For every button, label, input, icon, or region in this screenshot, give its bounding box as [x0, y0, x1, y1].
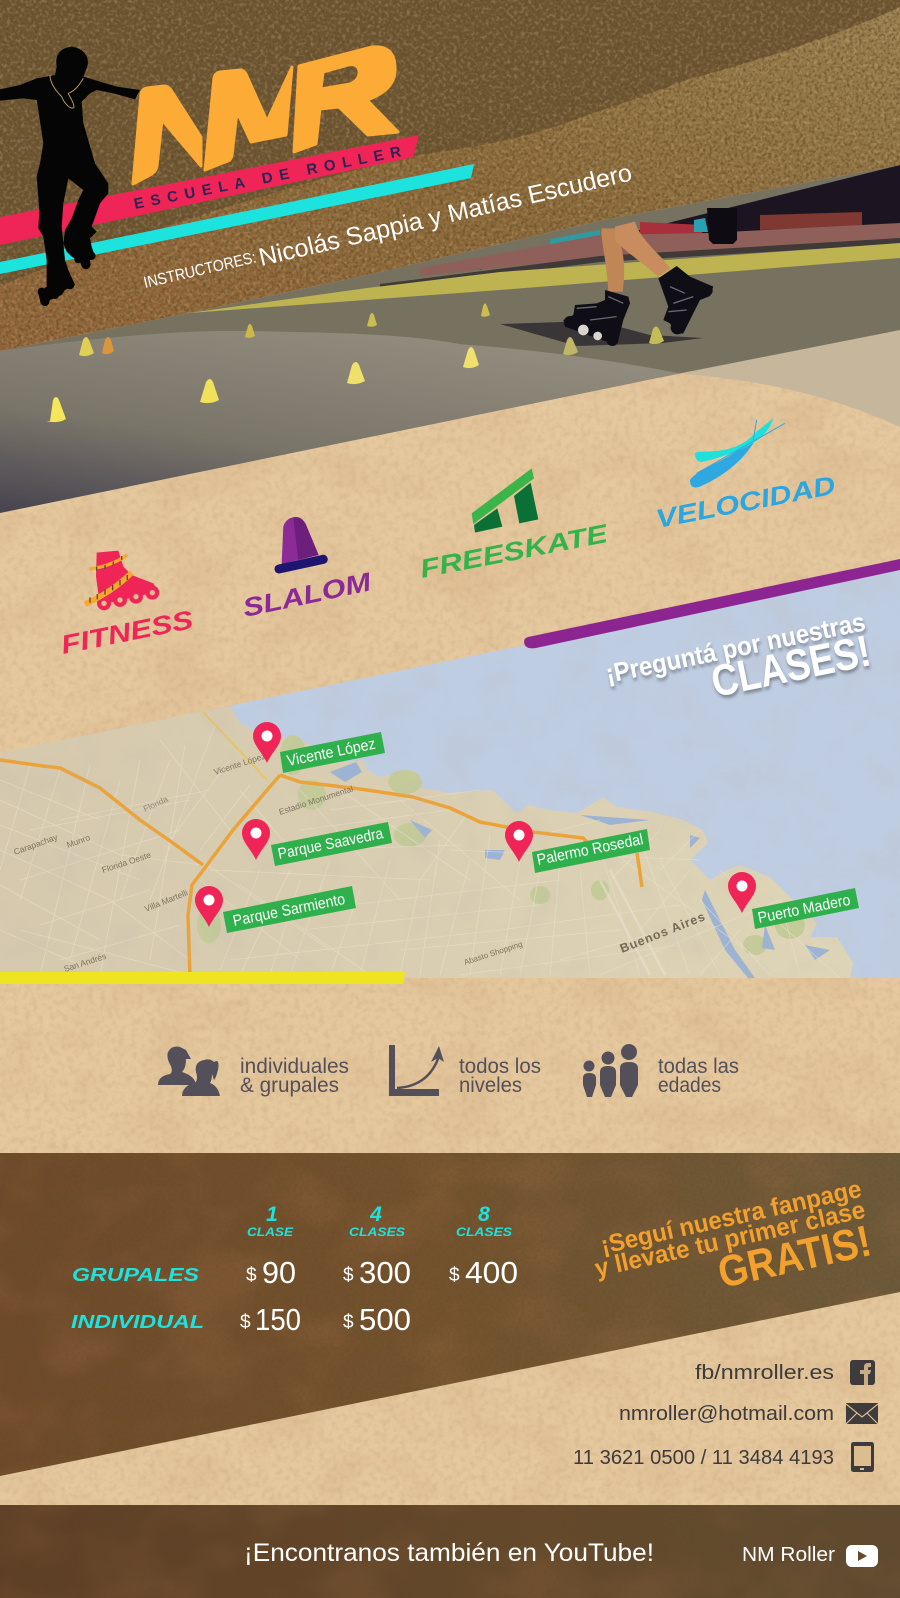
location: Parque Saavedra: Parque Saavedra [276, 825, 385, 863]
column headers: 4 [369, 1203, 382, 1226]
parks [197, 735, 805, 955]
feature: todas las edades [583, 1044, 739, 1097]
class type: velocidad [653, 418, 838, 534]
contact: phone [573, 1442, 874, 1472]
panel: map [0, 560, 900, 980]
class type: freeskate: FREESKATE [417, 518, 610, 584]
highways [0, 760, 642, 978]
map place names: Carapachay [12, 832, 59, 857]
location: Parque Sarmiento [195, 886, 356, 933]
prices: 400 [465, 1255, 518, 1290]
column headers: CLASES [456, 1227, 512, 1239]
map place names [12, 751, 524, 974]
feature: todos los niveles: todos los [459, 1055, 541, 1078]
yellow stripe [0, 972, 405, 984]
map place names: Florida Oeste [101, 850, 152, 875]
logo red bar with tagline [0, 135, 419, 245]
class type: slalom [240, 517, 375, 623]
cyan stripe [0, 164, 474, 274]
price table [71, 1203, 518, 1337]
location: Parque Sarmiento: Parque Sarmiento [231, 891, 347, 930]
class type: freeskate [417, 468, 610, 584]
prices: 90 [262, 1255, 296, 1290]
class type: fitness: FITNESS [58, 604, 196, 660]
panel: footer band [0, 1505, 900, 1598]
youtube callout [244, 1539, 878, 1567]
map place names: Abasto Shopping [463, 940, 524, 967]
class type: fitness [58, 551, 196, 660]
feature: individuales & grupales: & grupales [240, 1074, 339, 1097]
shaded paper corner [683, 330, 900, 427]
youtube callout: ¡Encontranos también en YouTube! [244, 1539, 654, 1567]
location: Parque Saavedra [242, 819, 392, 866]
promo: free first class: ¡Seguí nuestra fanpage [598, 1175, 864, 1260]
streets [0, 725, 840, 978]
location: Vicente López: Vicente López [285, 736, 377, 770]
panel: roller photo [0, 160, 900, 520]
panel: brown price section [0, 1153, 900, 1478]
location: Puerto Madero: Puerto Madero [756, 892, 852, 927]
prices: $ [240, 1312, 251, 1333]
prices [240, 1255, 518, 1337]
prices: $ [246, 1265, 257, 1286]
location: Palermo Rosedal: Palermo Rosedal [535, 831, 645, 869]
column headers: 8 [478, 1203, 490, 1226]
instructors text [142, 159, 635, 292]
feature: todas las edades: todas las [658, 1055, 739, 1078]
contact: email: nmroller@hotmail.com [619, 1402, 834, 1425]
panel: top brown band [0, 0, 900, 351]
contact: facebook: fb/nmroller.es [695, 1361, 834, 1384]
contact: facebook [695, 1360, 875, 1385]
prices: $ [343, 1265, 354, 1286]
location: Vicente López [253, 722, 385, 773]
class type: slalom: SLALOM [240, 566, 375, 623]
column headers: 1 [266, 1203, 278, 1226]
feature: todos los niveles [389, 1045, 541, 1097]
map place names: Vicente López [213, 751, 267, 777]
skater legs and skates [563, 222, 713, 346]
prices: $ [449, 1265, 460, 1286]
map place names: Munro [65, 832, 92, 850]
feature: todos los niveles: niveles [459, 1074, 522, 1097]
instructors text: Nicolás Sappia y Matías Escudero [256, 159, 635, 272]
skater shadow [500, 322, 703, 346]
map place names: Villa Martelli [143, 887, 189, 914]
column headers [247, 1203, 512, 1239]
location: Palermo Rosedal [505, 821, 650, 873]
location: Puerto Madero [728, 872, 859, 929]
prices: 500 [359, 1302, 411, 1337]
feature: individuales & grupales: individuales [240, 1055, 349, 1078]
logo red bar with tagline: ESCUELA DE ROLLER [132, 143, 403, 213]
map place names: Florida [142, 794, 170, 814]
map place names: Estadio Monumental [278, 783, 354, 817]
promo: free first class: y llevate tu primer clase [592, 1196, 868, 1283]
map place names: San Andrés [63, 951, 107, 974]
promo: free first class: GRATIS! [714, 1216, 875, 1298]
row labels [71, 1264, 204, 1332]
prices: $ [343, 1312, 354, 1333]
class type: velocidad: VELOCIDAD [653, 470, 838, 534]
panel: map: Buenos Aires [618, 910, 707, 956]
feature: todas las edades: edades [658, 1074, 721, 1097]
contact: phone: 11 3621 0500 / 11 3484 4193 [573, 1446, 834, 1469]
cones [46, 304, 664, 422]
logo NMR [133, 47, 398, 184]
row labels: INDIVIDUAL [71, 1311, 204, 1332]
instructors text: INSTRUCTORES: [142, 249, 258, 292]
prices: 300 [359, 1255, 411, 1290]
prices: 150 [255, 1302, 301, 1337]
feature: individuales & grupales [158, 1047, 349, 1097]
column headers: CLASE [247, 1227, 293, 1239]
heading: ask about classes: ¡Preguntá por nuestras [603, 606, 868, 689]
skater silhouette [0, 47, 140, 306]
row labels: GRUPALES [72, 1264, 200, 1285]
youtube callout: NM Roller [742, 1544, 835, 1566]
trash bin [707, 208, 737, 244]
purple stripe [524, 559, 900, 648]
column headers: CLASES [349, 1227, 405, 1239]
